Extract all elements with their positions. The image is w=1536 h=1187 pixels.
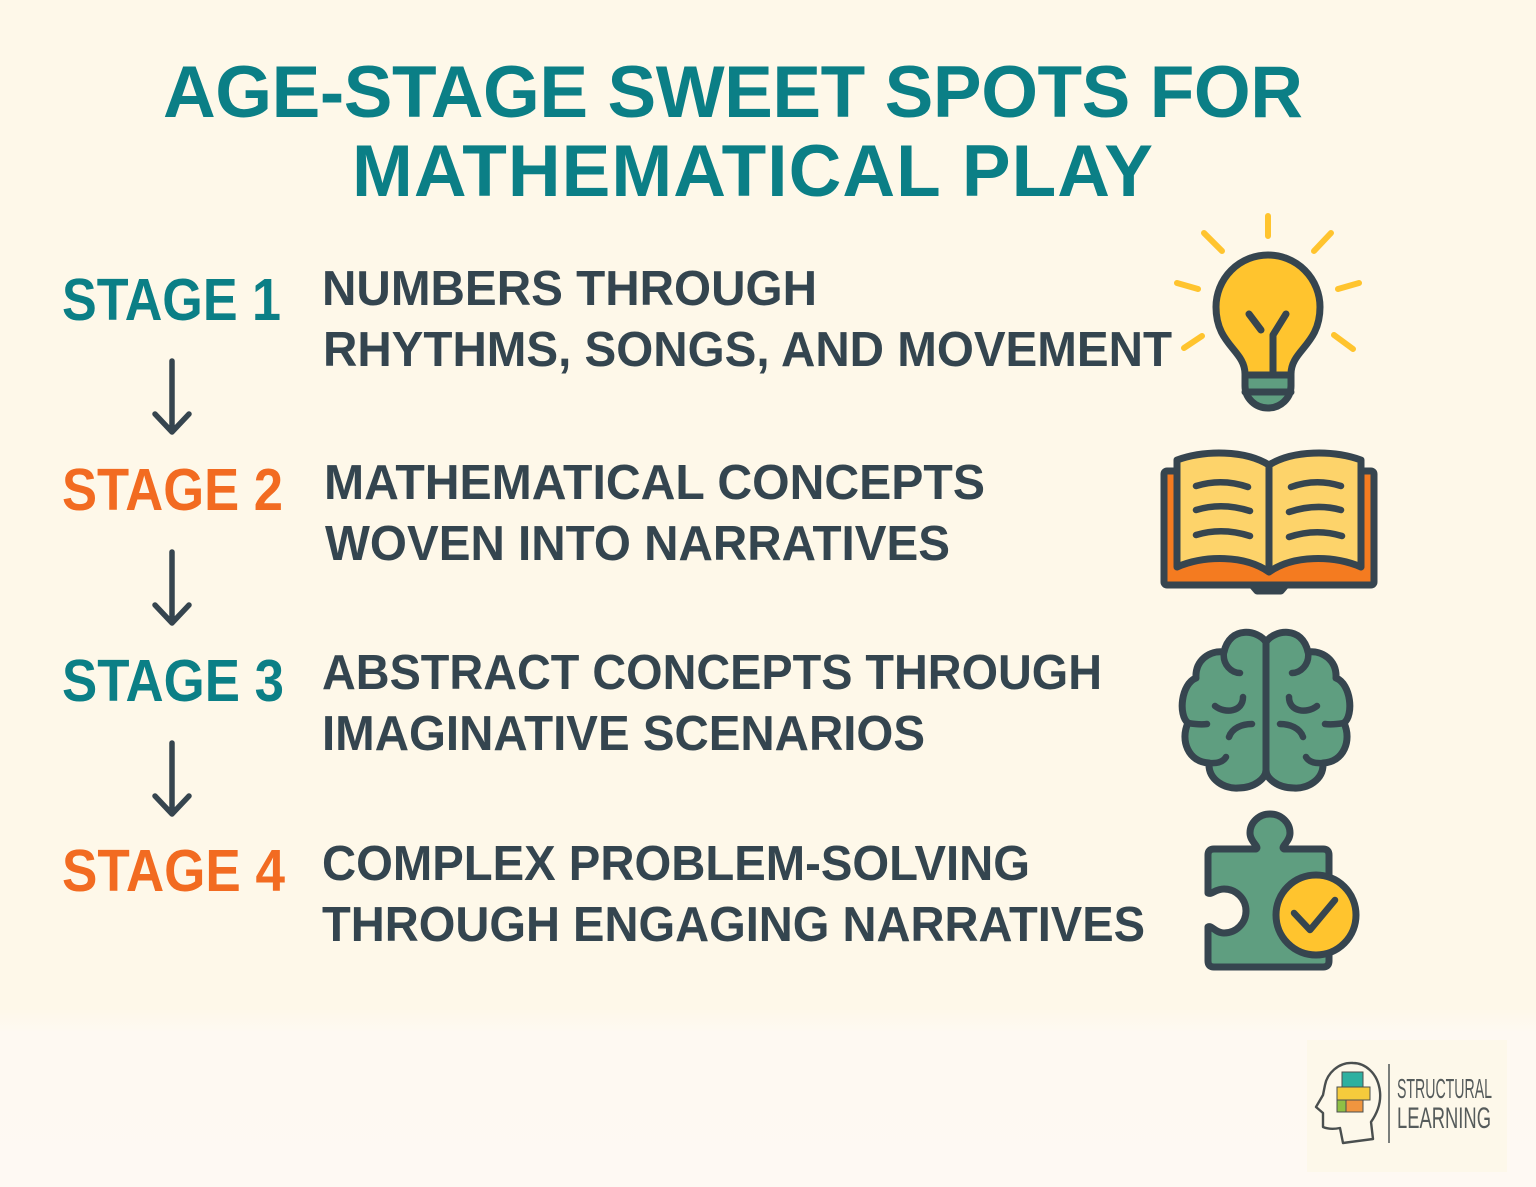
title: MATHEMATICAL PLAY [352,131,1153,212]
stage 2 description: MATHEMATICAL CONCEPTS [324,456,985,510]
logo wordmark [1397,1073,1492,1135]
stage 3 label: STAGE 3 [62,648,284,714]
arrow: stage 3 to 4 [155,743,189,814]
logo: Structural Learning [1307,1040,1507,1172]
arrow: stage 2 to 3 [155,552,189,623]
icon: puzzle piece with check [1208,814,1356,967]
arrow: stage 1 to 2 [155,361,189,432]
stage 4 label: STAGE 4 [62,838,285,904]
icon: light bulb [1177,216,1359,408]
icon: brain [1182,632,1350,788]
title [163,52,1303,212]
stage 1 label: STAGE 1 [62,267,281,333]
stage 1 description [322,262,1172,377]
stage 1 description: NUMBERS THROUGH [322,262,817,316]
stage 4 description: COMPLEX PROBLEM-SOLVING [322,837,1030,891]
stage 1 description: RHYTHMS, SONGS, AND MOVEMENT [323,323,1172,377]
stage 4 description: THROUGH ENGAGING NARRATIVES [322,898,1145,952]
icon: open book [1164,453,1374,591]
stage 3 row [62,632,1350,788]
stage 3 description: ABSTRACT CONCEPTS THROUGH [322,646,1102,700]
stage 1 row [62,216,1359,408]
title: AGE-STAGE SWEET SPOTS FOR [163,52,1303,133]
stage 2 description [324,456,985,571]
stage 2 description: WOVEN INTO NARRATIVES [325,517,950,571]
stage 4 row [62,814,1356,967]
icon: head with blocks [1316,1063,1380,1143]
stage 2 label: STAGE 2 [62,457,283,523]
stage 4 description [322,837,1145,952]
stage 2 row [62,453,1374,591]
stage 3 description: IMAGINATIVE SCENARIOS [322,707,925,761]
stage 3 description [322,646,1102,761]
